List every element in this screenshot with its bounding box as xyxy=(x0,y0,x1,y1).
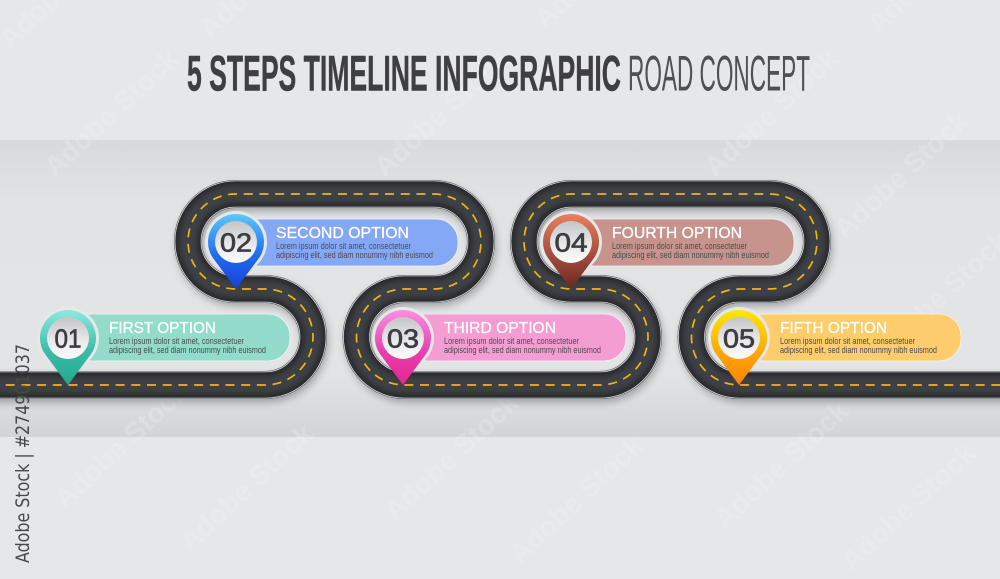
label panel 5: Lorem ipsum dolor sit amet, consectetuer xyxy=(780,336,915,346)
label panel 3: Lorem ipsum dolor sit amet, consectetuer xyxy=(444,336,579,346)
label panel 5: FIFTH OPTION xyxy=(780,320,887,337)
label panel 3 xyxy=(405,314,626,361)
watermarks: Adobe Stock xyxy=(835,437,982,576)
label panel 4 xyxy=(572,219,794,266)
label panel 4: adipiscing elit, sed diam nonummy nibh euismod xyxy=(612,250,769,260)
winding road xyxy=(0,194,1000,389)
location pin 03 xyxy=(372,307,434,385)
label panel 4: FOURTH OPTION xyxy=(612,225,742,242)
label panel 5: adipiscing elit, sed diam nonummy nibh euismod xyxy=(780,345,937,355)
step 1: first option xyxy=(37,307,290,385)
watermarks: Adobe Stock xyxy=(378,387,525,526)
label panel 3: adipiscing elit, sed diam nonummy nibh euismod xyxy=(444,345,601,355)
label panel 1 xyxy=(70,314,290,361)
location pin 05 xyxy=(708,307,770,385)
label panel 4: Lorem ipsum dolor sit amet, consectetuer xyxy=(612,241,747,251)
label panel 2 xyxy=(236,219,458,266)
location pin 05: 05 xyxy=(723,324,755,354)
label panel 3: THIRD OPTION xyxy=(444,320,556,337)
label panel 1: adipiscing elit, sed diam nonummy nibh euismod xyxy=(109,345,266,355)
watermarks: Adobe Stock xyxy=(368,43,515,182)
stock credit: Adobe Stock | #274901037 xyxy=(12,344,34,563)
title: 5 STEPS TIMELINE INFOGRAPHIC xyxy=(187,46,621,102)
location pin 03: 03 xyxy=(387,324,419,354)
location pin 04 xyxy=(540,211,602,289)
step 5: fifth option xyxy=(708,307,961,385)
location pin 04: 04 xyxy=(554,228,588,258)
background band xyxy=(0,140,1000,437)
watermarks: Adobe Stock xyxy=(698,43,845,182)
watermarks: Adobe Stock xyxy=(828,105,975,244)
location pin 01: 01 xyxy=(54,324,82,354)
step 2: second option xyxy=(205,211,458,289)
location pin 02: 02 xyxy=(220,228,252,258)
step 4: fourth option xyxy=(540,211,794,289)
step 3: third option xyxy=(372,307,626,385)
label panel 5 xyxy=(741,314,961,361)
watermarks: Adobe Stock xyxy=(173,418,320,557)
label panel 2: adipiscing elit, sed diam nonummy nibh euismod xyxy=(276,250,433,260)
label panel 2: SECOND OPTION xyxy=(276,225,409,242)
label panel 2: Lorem ipsum dolor sit amet, consectetuer xyxy=(276,241,411,251)
watermarks: Adobe Stock xyxy=(708,395,855,534)
label panel 1: Lorem ipsum dolor sit amet, consectetuer xyxy=(109,336,244,346)
location pin 01 xyxy=(37,307,99,385)
location pin 02 xyxy=(205,211,267,289)
watermarks: Adobe Stock xyxy=(503,430,650,569)
watermarks: Adobe Stock xyxy=(38,43,185,182)
label panel 1: FIRST OPTION xyxy=(109,320,216,337)
watermarks: Adobe Stock xyxy=(48,375,195,514)
